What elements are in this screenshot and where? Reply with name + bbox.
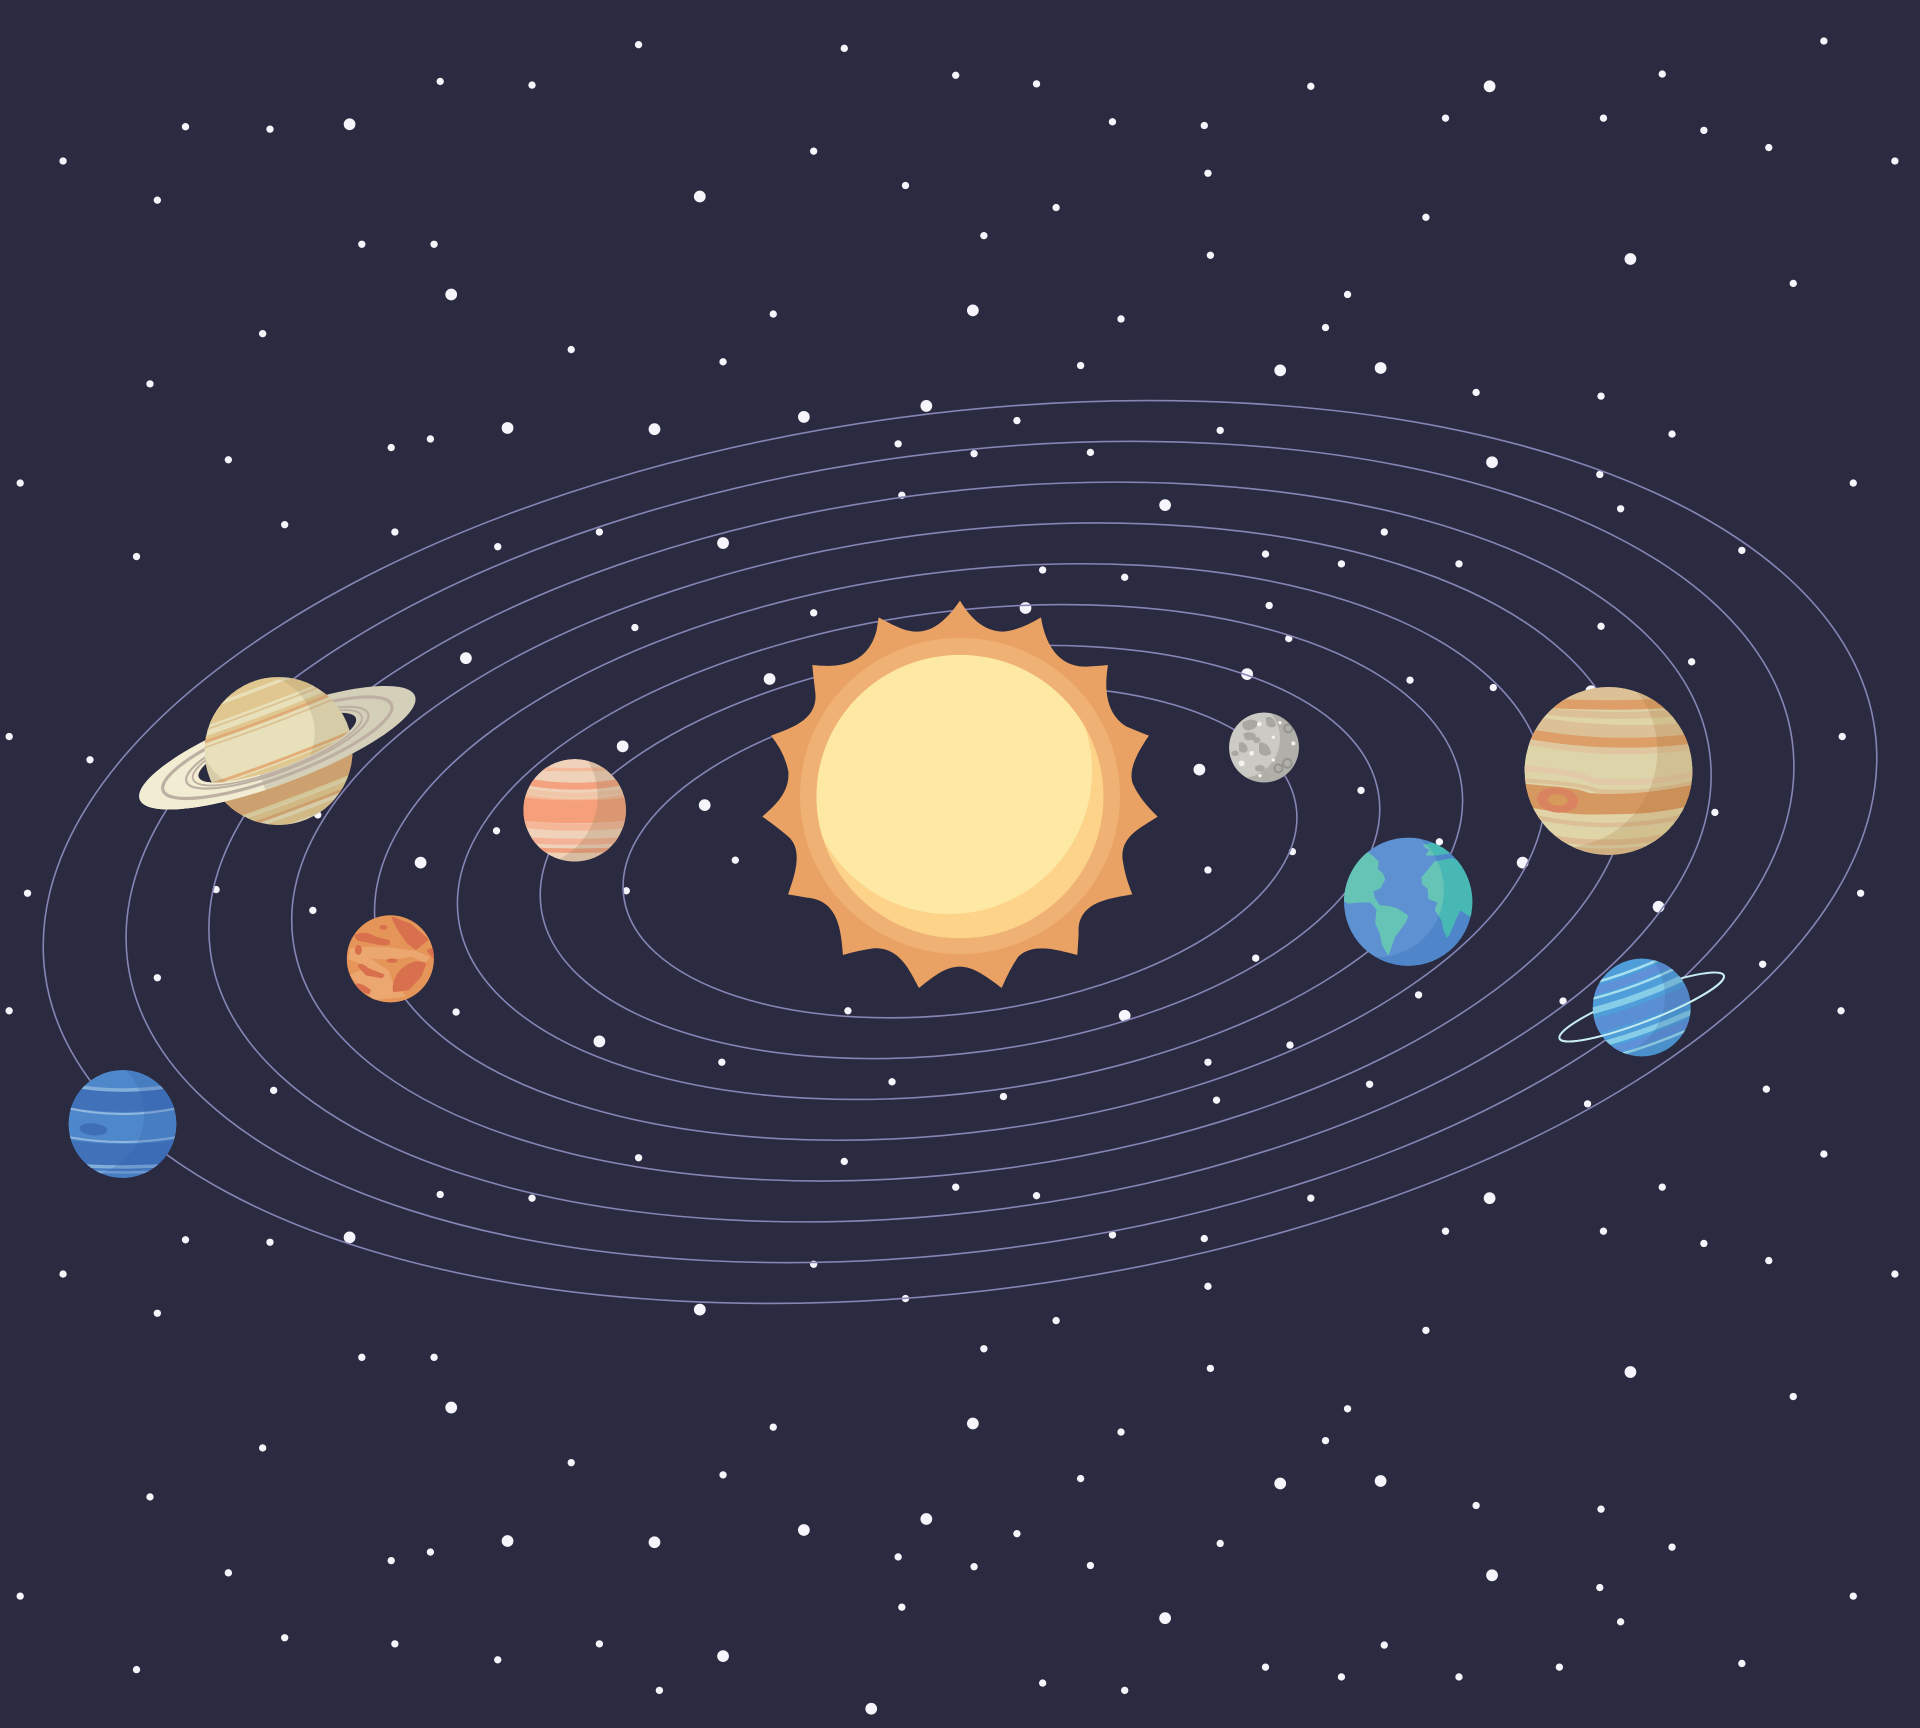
- planet: neptune: [68, 1070, 176, 1178]
- planet: saturn: [139, 677, 416, 825]
- uranus ring front: [1558, 975, 1725, 1042]
- planet: venus: [523, 759, 626, 862]
- sun rays: [762, 601, 1158, 988]
- planet: earth: [1344, 838, 1472, 966]
- orbit lines: [0, 296, 1920, 1408]
- saturn ring front: [140, 696, 416, 810]
- sun outer ring: [800, 638, 1120, 954]
- sun disc: [816, 655, 1104, 938]
- planet: uranus: [1558, 958, 1725, 1056]
- uranus body: [1592, 958, 1691, 1056]
- sun highlight: [816, 654, 1092, 914]
- sun: [762, 601, 1158, 988]
- planet: mercury: [1229, 712, 1299, 782]
- saturn ring back: [127, 662, 428, 833]
- planet: jupiter: [1524, 687, 1692, 855]
- great red spot: [1537, 788, 1578, 813]
- saturn body: [204, 677, 352, 825]
- uranus ring back: [1554, 961, 1729, 1053]
- planet: mars: [347, 915, 435, 1002]
